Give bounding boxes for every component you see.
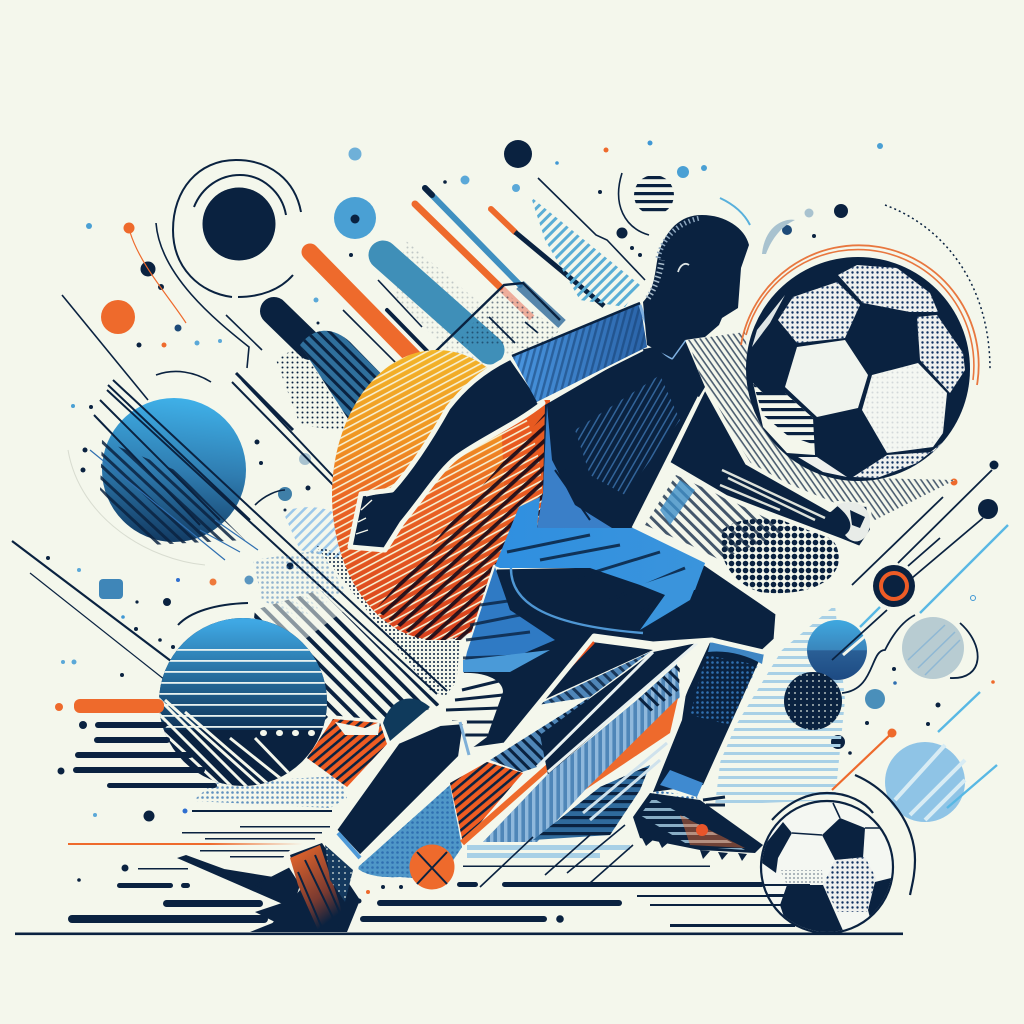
left arm xyxy=(350,357,543,550)
torso and jersey xyxy=(512,303,705,528)
sun: yellow-orange striped disc xyxy=(332,350,550,640)
big blue striped circle xyxy=(90,380,447,694)
scattered dots xyxy=(46,140,998,882)
illustration: footballer with abstract shapes xyxy=(11,140,1009,936)
halftone and stripe field lower left xyxy=(193,507,460,808)
thin diagonal lines xyxy=(12,173,649,726)
boot of back leg xyxy=(633,793,763,861)
blue moon circle with stripes xyxy=(159,618,327,786)
diagonal bars top xyxy=(274,188,640,432)
player figure xyxy=(265,215,872,932)
right side circles and lines xyxy=(634,175,1008,822)
diagonal stripe mass xyxy=(347,635,712,887)
back leg xyxy=(650,626,768,810)
front leg xyxy=(265,673,503,932)
big football xyxy=(741,245,979,481)
shorts xyxy=(495,497,705,630)
left speed lines xyxy=(15,699,903,935)
rounded blue tile xyxy=(99,579,123,599)
orange wedge by knee xyxy=(307,698,430,787)
bottom speed lines xyxy=(356,866,795,927)
orange circle with X xyxy=(410,844,454,890)
hips and thigh xyxy=(450,563,778,750)
stripe fan and halftone behind arm xyxy=(645,332,955,805)
small football xyxy=(760,775,915,935)
head and neck xyxy=(643,215,749,358)
top-left ring with navy circle xyxy=(173,160,301,297)
right arm xyxy=(668,387,872,548)
